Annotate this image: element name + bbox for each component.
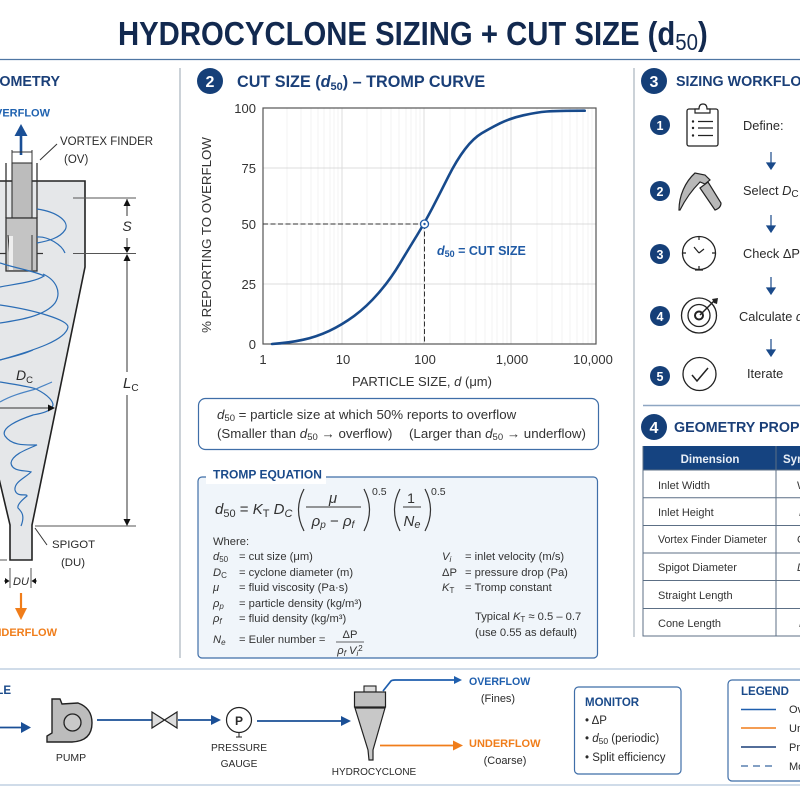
panel: cut size tromp curve [197, 68, 613, 658]
equation: ρ [312, 513, 320, 530]
equation: K [253, 501, 263, 518]
step 3 check pressure drop: 3 [657, 248, 664, 262]
pressure gauge: GAUGE [221, 759, 258, 770]
variable definitions: = cut size (μm) [239, 551, 313, 563]
title [0, 15, 800, 60]
d50 label: d [437, 244, 445, 258]
heading: geometry proportions [641, 414, 800, 440]
monitor box: 50 [599, 736, 608, 746]
panel: tromp equation [198, 468, 598, 658]
variable definitions: 2 [358, 644, 363, 653]
heading: sizing workflow: 3 [650, 74, 659, 91]
equation: − [326, 513, 343, 530]
variable definitions: ΔP [442, 567, 457, 579]
variable definitions: K [442, 582, 449, 594]
equation: 0.5 [372, 486, 387, 498]
equation: N [404, 513, 414, 530]
heading: cut size: 2 [206, 74, 215, 91]
callout: d50 definition: d [217, 407, 225, 422]
table: Spigot Diameter [658, 562, 737, 574]
step 3 check pressure drop: Check ΔP [743, 246, 800, 261]
x axis labels: PARTICLE SIZE, d (μm) [352, 374, 492, 389]
pump: PUMP [56, 752, 86, 764]
legend [728, 680, 800, 781]
equation: D [269, 501, 285, 518]
pressure gauge: PRESSURE [211, 743, 267, 754]
overflow arrow [0, 108, 51, 155]
variable definitions: = pressure drop (Pa) [465, 567, 568, 579]
variable definitions: e [221, 638, 226, 647]
arrow [767, 152, 775, 169]
y axis labels: 50 [242, 217, 256, 232]
vortex finder label [12, 136, 153, 166]
equation: = [236, 501, 253, 518]
overflow stream [383, 676, 530, 705]
equation: C [284, 508, 292, 520]
variable definitions: T [449, 586, 454, 595]
heading: sizing workflow [641, 68, 800, 94]
y axis labels: 0 [249, 337, 256, 352]
step 5 iterate: Iterate [747, 366, 783, 381]
title: 50 [675, 29, 698, 55]
step 1 define: 1 [657, 119, 664, 133]
hydrocyclone [332, 686, 417, 778]
spigot label: (DU) [61, 557, 85, 569]
variable definitions: T [520, 615, 525, 624]
equation: 0.5 [431, 486, 446, 498]
monitor box: • d [585, 733, 599, 745]
variable definitions: = cyclone diameter (m) [239, 567, 353, 579]
table [643, 446, 800, 636]
variable definitions: = fluid viscosity (Pa·s) [239, 582, 348, 594]
underflow stream: UNDERFLOW [469, 738, 541, 750]
variable definitions: d [213, 551, 219, 563]
variable definitions: μ [212, 582, 219, 594]
panel: geometry proportions [641, 414, 800, 636]
callout: d50 definition: = particle size at which 50% reports to overflow [235, 407, 517, 422]
step 3 check pressure drop [650, 236, 800, 270]
dimension: Dc: C [26, 375, 33, 386]
step 4 calculate d50: 4 [657, 310, 664, 324]
feed label and arrow [0, 685, 31, 733]
vortex finder label: (OV) [64, 154, 88, 166]
equation: p [319, 520, 326, 531]
vortex finder label: VORTEX FINDER [60, 136, 153, 148]
callout: d50 definition: → underflow) [503, 426, 586, 441]
step 5 iterate [650, 358, 783, 390]
arrow [767, 277, 775, 294]
dimension: Dc [0, 367, 55, 412]
monitor box: • Split efficiency [585, 752, 666, 764]
variable definitions: = Euler number = [239, 634, 325, 646]
heading: cut size: ) – TROMP CURVE [343, 73, 485, 91]
x axis labels: 100 [414, 352, 436, 367]
callout: d50 definition: 50 [493, 432, 503, 443]
variable definitions: ρ [213, 613, 219, 625]
equation: d [215, 501, 223, 518]
variable definitions: ρ [213, 598, 219, 610]
arrow [767, 215, 775, 232]
variable definitions: = Tromp constant [465, 582, 553, 594]
heading: cut size: 50 [331, 81, 343, 93]
variable definitions: ≈ 0.5 – 0.7 [525, 611, 581, 623]
panel: sizing workflow [641, 68, 800, 390]
d50 label: = CUT SIZE [455, 244, 526, 258]
hydrocyclone: HYDROCYCLONE [332, 767, 417, 778]
equation: 50 [223, 508, 236, 520]
variable definitions: C [221, 571, 227, 580]
variable definitions: Typical K [475, 611, 520, 623]
underflow stream [380, 738, 541, 767]
x axis labels: 1 [259, 352, 267, 367]
valve [152, 712, 177, 728]
y axis labels: 100 [234, 101, 256, 116]
step 5 iterate: 5 [657, 370, 664, 384]
tromp curve chart [199, 101, 613, 389]
table: Vortex Finder Diameter [658, 534, 767, 546]
variable definitions: V [442, 551, 449, 563]
overflow stream: OVERFLOW [469, 676, 530, 688]
title: ) [698, 15, 708, 52]
pressure gauge: P [235, 714, 243, 728]
monitor box [574, 687, 681, 774]
cyclone body [0, 163, 85, 560]
y axis labels [199, 101, 256, 352]
dimension: S and Lc: L [123, 375, 131, 392]
heading: cut size [197, 68, 485, 94]
variable definitions: i [449, 555, 451, 564]
variable definitions: p [218, 602, 224, 611]
table: Inlet Width [658, 480, 710, 492]
equation: 1 [407, 490, 415, 506]
equation: ρ [343, 513, 352, 530]
variable definitions: ρ [337, 645, 344, 657]
variable definitions: (use 0.55 as default) [475, 627, 577, 639]
variable definitions: V [346, 645, 358, 657]
variable definitions [212, 536, 581, 658]
dimension: S and Lc: C [131, 383, 139, 394]
dimension: Dc: D [16, 367, 26, 383]
variable definitions: f [219, 617, 222, 626]
step 2 select Dc [650, 173, 799, 210]
curve [272, 111, 585, 344]
callout: d50 definition: 50 [307, 432, 318, 443]
variable definitions: D [213, 567, 221, 579]
variable definitions: 50 [219, 555, 229, 564]
dimension: S and Lc: S [122, 218, 132, 234]
callout: d50 definition: 50 [224, 413, 235, 424]
dimension: S and Lc [35, 198, 139, 526]
table: Cone Length [658, 618, 721, 630]
callout: d50 definition: → overflow) [318, 426, 392, 441]
legend: LEGEND [741, 686, 789, 698]
d50 marker [420, 220, 428, 228]
pressure gauge [211, 708, 267, 770]
vortex spiral [0, 209, 68, 526]
heading: geometry proportions: 4 [650, 420, 659, 437]
x axis labels [259, 352, 613, 389]
variable definitions: f [344, 649, 347, 658]
overflow stream: (Fines) [481, 693, 515, 705]
variable definitions: = fluid density (kg/m³) [239, 613, 347, 625]
x axis labels: 10,000 [573, 352, 613, 367]
arrow to gauge [211, 715, 221, 725]
d50 label: 50 [445, 249, 455, 259]
arrow [767, 339, 775, 356]
monitor box: • ΔP [585, 715, 607, 727]
callout: d50 definition: (Larger than d [409, 426, 493, 441]
spigot label [35, 528, 95, 569]
x axis labels: 10 [336, 352, 350, 367]
panel: process flow [0, 676, 800, 781]
y axis labels: 25 [242, 277, 256, 292]
monitor box: (periodic) [608, 733, 659, 745]
variable definitions: Where: [213, 536, 249, 548]
equation [215, 486, 446, 531]
arrow to hydrocyclone [341, 716, 351, 726]
variable definitions: ΔP [343, 629, 357, 641]
underflow arrow [0, 593, 58, 639]
heading: cut size: CUT SIZE (d [237, 73, 331, 91]
step 2 select Dc: C [791, 189, 799, 200]
equation: μ [328, 490, 337, 507]
variable definitions: = inlet velocity (m/s) [465, 551, 564, 563]
equation: e [414, 519, 420, 531]
callout: d50 definition [198, 398, 598, 450]
panel: cyclone geometry [0, 74, 153, 639]
dimension: DU: DU [13, 576, 29, 588]
step 2 select Dc: 2 [657, 185, 664, 199]
panel: tromp equation: TROMP EQUATION [213, 468, 322, 482]
step 1 define [650, 104, 784, 146]
dimension: DU [4, 568, 37, 588]
variable definitions: i [356, 649, 358, 658]
monitor box: MONITOR [585, 697, 640, 709]
step 2 select Dc: Select D [743, 183, 791, 198]
step 4 calculate d50 [650, 298, 800, 333]
table: Dimension [681, 454, 739, 466]
pump [47, 699, 92, 764]
callout: d50 definition: (Smaller than d [217, 426, 307, 441]
step 1 define: Define: [743, 118, 784, 133]
equation: T [263, 508, 270, 520]
x axis labels: 1,000 [496, 352, 528, 367]
equation: f [352, 520, 356, 531]
y axis labels: % REPORTING TO OVERFLOW [199, 137, 214, 333]
y axis labels: 75 [242, 161, 256, 176]
underflow stream: (Coarse) [484, 755, 526, 767]
table: Straight Length [658, 590, 733, 602]
variable definitions: = particle density (kg/m³) [239, 598, 362, 610]
variable definitions: N [213, 634, 221, 646]
table: Inlet Height [658, 507, 714, 519]
title: HYDROCYCLONE SIZING + CUT SIZE (d [118, 15, 675, 52]
spigot label: SPIGOT [52, 539, 95, 551]
